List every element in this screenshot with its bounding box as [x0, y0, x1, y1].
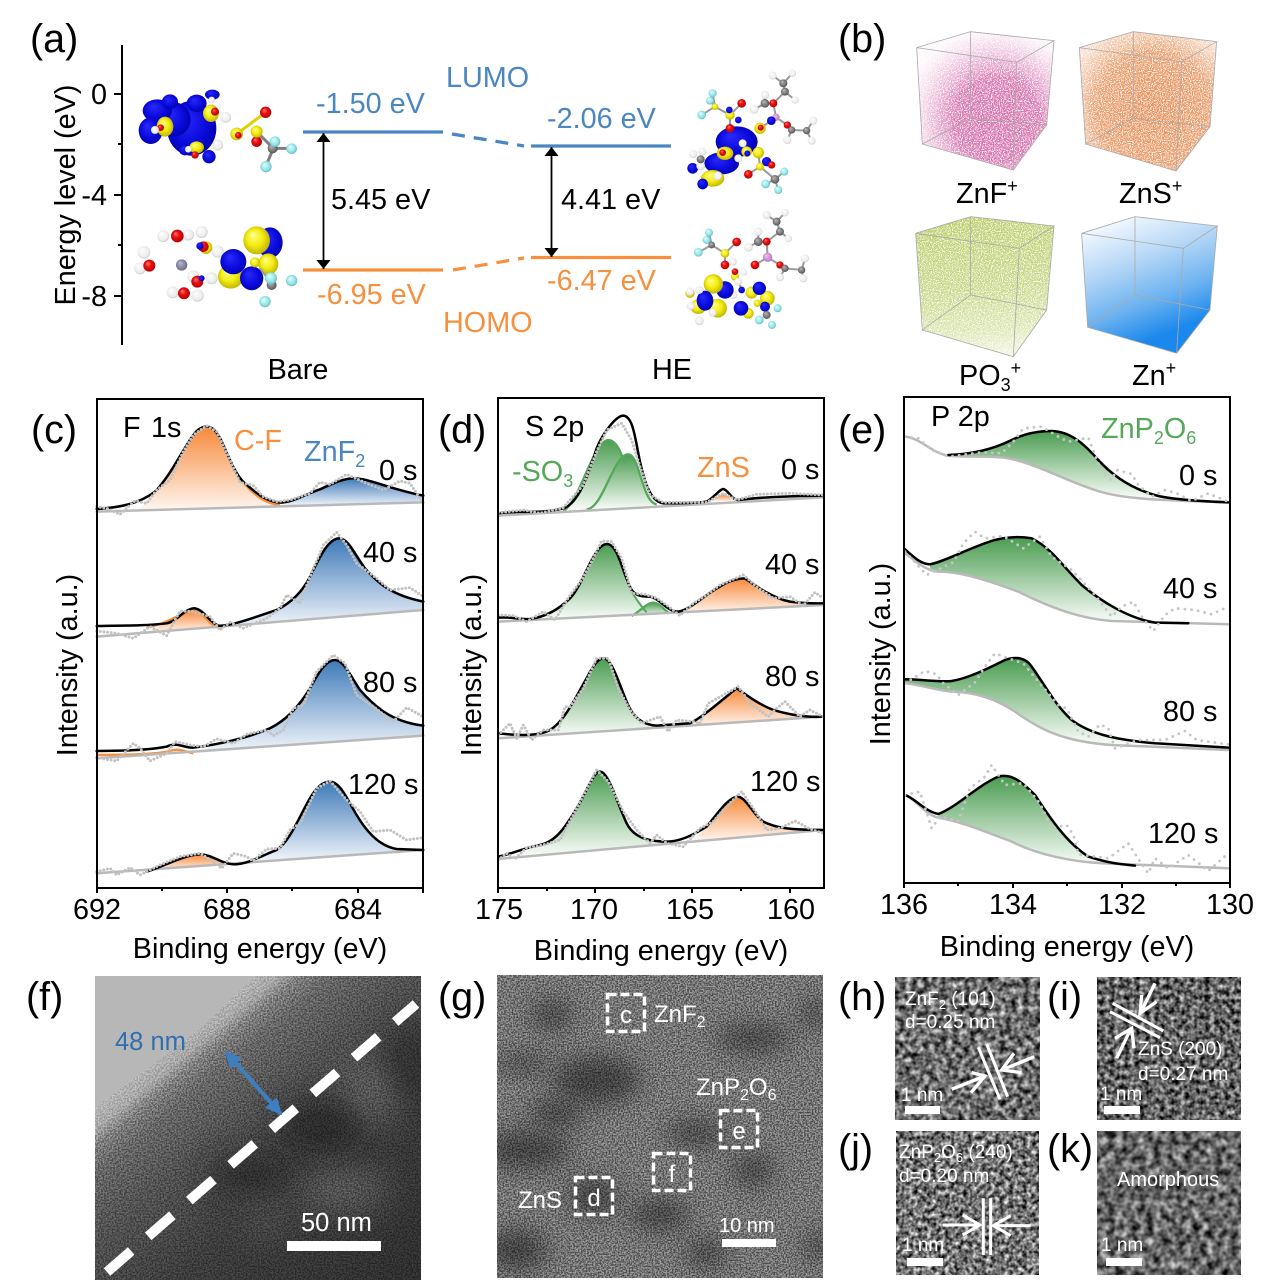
label: 48 nm: 48 nm: [115, 1028, 186, 1056]
LUMO energy levels: [303, 132, 671, 146]
lattice image: [895, 977, 1040, 1120]
time: 40 s: 40 s: [363, 537, 417, 569]
y axis title: Intensity (a.u.): [456, 574, 488, 756]
label: ZnP2O6 (240): ZnP: [899, 1142, 934, 1163]
HRTEM image: [483, 975, 832, 1278]
value: 5.45 eV: 5.45 eV: [331, 184, 431, 216]
spectrum: 120 s: [97, 781, 423, 875]
label: -SO3: 3: [563, 471, 573, 491]
label: ZnF2 (101): 2: [939, 997, 946, 1012]
x tick labels: 170: [570, 894, 618, 926]
value: -6.47 eV: -6.47 eV: [547, 265, 657, 297]
value: -6.95 eV: -6.95 eV: [317, 279, 427, 311]
label: PO3+: PO: [959, 360, 1001, 392]
x tick labels: 688: [203, 894, 251, 926]
label: ZnP2O6: O: [1164, 413, 1186, 445]
label: ZnP2O6 (240): 2: [934, 1150, 941, 1165]
time: 80 s: 80 s: [1163, 696, 1217, 728]
spectrum: 0 s: [905, 427, 1228, 502]
time: 0 s: 0 s: [379, 455, 417, 487]
selection box d: [576, 1178, 612, 1214]
label: Zn+: Zn: [1132, 360, 1166, 392]
scale bar: [287, 1241, 381, 1251]
y axis title: Energy level (eV): [50, 85, 82, 305]
y axis title: Intensity (a.u.): [52, 574, 84, 756]
label: ZnP2O6: 2: [740, 1087, 749, 1104]
x tick labels: 684: [334, 894, 382, 926]
x tick labels: [475, 894, 815, 926]
panel: (h) ZnF2 lattice: [838, 975, 1040, 1120]
label: F 1s: F: [123, 412, 141, 444]
panel: (a) energy level diagram: [30, 17, 817, 386]
spectrum: 0 s: [97, 426, 423, 514]
label: ZnF+: ZnF: [956, 178, 1007, 210]
x tick labels: 136: [880, 889, 928, 921]
label: ZnF2: 2: [697, 1014, 706, 1031]
panel: (b) ToF-SIMS cubes: [838, 17, 1217, 395]
x tick labels: 132: [1098, 889, 1146, 921]
panel letter e: (e): [838, 408, 886, 452]
scale bar: [907, 1258, 943, 1266]
spectrum: 40 s: [97, 532, 423, 638]
label: ZnS (200): ZnS (200): [1138, 1039, 1222, 1060]
panel: (j) ZnP2O6 lattice: [838, 1127, 1039, 1275]
label: ZnP2O6: 2: [1154, 428, 1164, 448]
label: d-spacing: d=0.25 nm: [905, 1012, 995, 1033]
x tick labels: [73, 894, 382, 926]
selection box c: c: [620, 1002, 632, 1029]
spectrum: 40 s: [498, 541, 823, 622]
panel: (c) F 1s XPS spectra: [31, 399, 423, 965]
label: F 1s: 1s: [151, 412, 181, 444]
label: ZnP2O6: 6: [1186, 428, 1196, 448]
double arrow: thickness: [226, 1052, 281, 1114]
label: 1 nm: 1 nm: [1101, 1235, 1143, 1256]
label: ZnF2 (101): ZnF: [905, 989, 939, 1010]
label: PO3+: 3: [1001, 375, 1011, 395]
x axis title: Binding energy (eV): [940, 931, 1194, 963]
label: ZnP2O6 (240): (240): [963, 1142, 1013, 1163]
panel: (i) ZnS lattice: [1047, 975, 1241, 1120]
panel letter j: (j): [838, 1127, 873, 1171]
spectrum: 0 s: [498, 416, 823, 516]
y axis: -8: [81, 281, 107, 313]
label: P 2p: P 2p: [931, 401, 990, 433]
label: ZnS+: ZnS: [1119, 178, 1172, 210]
label: 50 nm: 50 nm: [301, 1209, 372, 1237]
time: 0 s: 0 s: [781, 454, 819, 486]
selection box e: [720, 1110, 758, 1148]
cube: ZnS+: [1079, 32, 1217, 171]
value: -2.06 eV: -2.06 eV: [547, 103, 657, 135]
axis frame: [498, 398, 824, 893]
y axis: 0: [91, 79, 107, 111]
label: ZnP2O6: ZnP: [696, 1074, 740, 1101]
spectrum: 80 s: [905, 653, 1228, 750]
arrow: bare gap: [322, 133, 324, 269]
label: S 2p: S 2p: [525, 411, 584, 443]
y axis title: Intensity (a.u.): [865, 563, 897, 745]
label: ZnF2: ZnF: [304, 436, 355, 468]
cube: PO3+: [916, 217, 1054, 357]
label: ZnP2O6: ZnP: [1101, 413, 1154, 445]
label: ZnS: ZnS: [697, 452, 750, 484]
lattice image: [896, 1131, 1039, 1275]
arrow: HE gap: [550, 147, 552, 257]
time: 80 s: 80 s: [765, 661, 819, 693]
label: ZnP2O6: 6: [768, 1087, 777, 1104]
x tick labels: [880, 889, 1254, 921]
x tick labels: 692: [73, 894, 121, 926]
x axis title: Binding energy (eV): [133, 933, 387, 965]
x tick labels: 175: [475, 894, 523, 926]
label: d-spacing: d=0.27 nm: [1138, 1064, 1228, 1085]
time: 40 s: 40 s: [765, 549, 819, 581]
panel: (f) cross-section TEM: [26, 975, 435, 1280]
label: Amorphous: Amorphous: [1117, 1169, 1219, 1191]
panel letter i: (i): [1047, 975, 1082, 1019]
lattice image: [1097, 1131, 1241, 1275]
axis frame: [904, 397, 1230, 888]
label: 1 nm: 1 nm: [902, 1235, 944, 1256]
panel letter h: (h): [838, 975, 886, 1019]
label: Bare: Bare: [268, 354, 328, 386]
axis frame: [97, 399, 423, 893]
lattice lines and arrows: [1110, 983, 1163, 1058]
panel letter a: (a): [30, 17, 78, 61]
spectrum: 40 s: [905, 532, 1228, 631]
selection box f: [654, 1154, 690, 1190]
molecule: HE LUMO: [687, 70, 817, 194]
label: -SO3: -SO: [512, 456, 563, 488]
x tick labels: 134: [989, 889, 1037, 921]
molecule: bare LUMO: [139, 90, 297, 172]
time: 120 s: 120 s: [348, 769, 418, 801]
value: 4.41 eV: 4.41 eV: [561, 184, 661, 216]
panel letter f: (f): [26, 975, 63, 1019]
panel letter d: (d): [438, 408, 486, 452]
panel letter c: (c): [31, 408, 77, 452]
panel: (g) HRTEM overview: [438, 975, 832, 1278]
label: ZnF2: ZnF: [654, 1001, 697, 1028]
x tick labels: 160: [767, 894, 815, 926]
scale bar: [1106, 1258, 1142, 1266]
scale bar: [905, 1106, 940, 1114]
label: d-spacing: d=0.20 nm: [899, 1166, 989, 1187]
selection box d: d: [587, 1185, 601, 1212]
x tick labels: 130: [1206, 889, 1254, 921]
label: 1 nm: 1 nm: [1100, 1084, 1142, 1105]
label: ZnS: ZnS: [518, 1187, 562, 1214]
label: ZnP2O6 (240): 6: [956, 1150, 963, 1165]
time: 80 s: 80 s: [363, 667, 417, 699]
spectrum: 120 s: [498, 770, 823, 860]
dashed interface line: [107, 1004, 416, 1272]
time: 120 s: 120 s: [1148, 818, 1218, 850]
time: 40 s: 40 s: [1163, 573, 1217, 605]
time: 0 s: 0 s: [1179, 460, 1217, 492]
lattice lines and arrows: [952, 1044, 1034, 1099]
value: -1.50 eV: -1.50 eV: [316, 88, 426, 120]
spectrum: 120 s: [905, 765, 1228, 873]
spectrum: 80 s: [97, 655, 423, 761]
label: C-F: C-F: [234, 425, 282, 457]
panel: (k) amorphous region: [1047, 1127, 1241, 1275]
time: 120 s: 120 s: [750, 766, 820, 798]
x axis title: Binding energy (eV): [534, 935, 788, 967]
selection box c: [608, 994, 644, 1032]
panel letter k: (k): [1047, 1127, 1093, 1171]
label: HE: HE: [652, 354, 692, 386]
scale bar: [722, 1239, 776, 1247]
y axis: [81, 45, 122, 345]
lattice lines and arrows: [943, 1198, 1031, 1255]
label: ZnF2 (101): (101): [946, 989, 996, 1010]
lattice image: [1097, 977, 1241, 1120]
selection box f: f: [669, 1161, 676, 1188]
cube: ZnF+: [917, 32, 1054, 170]
label: ZnP2O6: O: [749, 1074, 768, 1101]
TEM image: [95, 976, 435, 1280]
label: 10 nm: 10 nm: [719, 1215, 775, 1237]
panel letter b: (b): [838, 17, 886, 61]
x tick labels: 165: [666, 894, 714, 926]
panel: (e) P 2p XPS spectra: [838, 397, 1254, 963]
panel letter g: (g): [438, 975, 486, 1019]
label: ZnF2: 2: [355, 451, 365, 471]
label: ZnP2O6 (240): O: [941, 1142, 956, 1163]
spectrum: 80 s: [498, 658, 823, 740]
HOMO energy levels: [303, 258, 671, 270]
panel: (d) S 2p XPS spectra: [438, 398, 824, 967]
label: PO3+: +: [1011, 358, 1021, 378]
selection box e: e: [732, 1118, 746, 1145]
label: 1 nm: 1 nm: [901, 1085, 943, 1106]
label: LUMO: LUMO: [446, 62, 529, 94]
label: ZnF+: +: [1007, 176, 1018, 196]
molecule: HE HOMO: [685, 209, 809, 329]
cube: Zn+: [1082, 217, 1217, 353]
label: Zn+: +: [1166, 358, 1176, 378]
label: HOMO: HOMO: [443, 307, 533, 339]
molecule: bare HOMO: [134, 226, 297, 307]
y axis: -4: [81, 180, 107, 212]
label: ZnS+: +: [1172, 176, 1182, 196]
scale bar: [1104, 1106, 1140, 1114]
